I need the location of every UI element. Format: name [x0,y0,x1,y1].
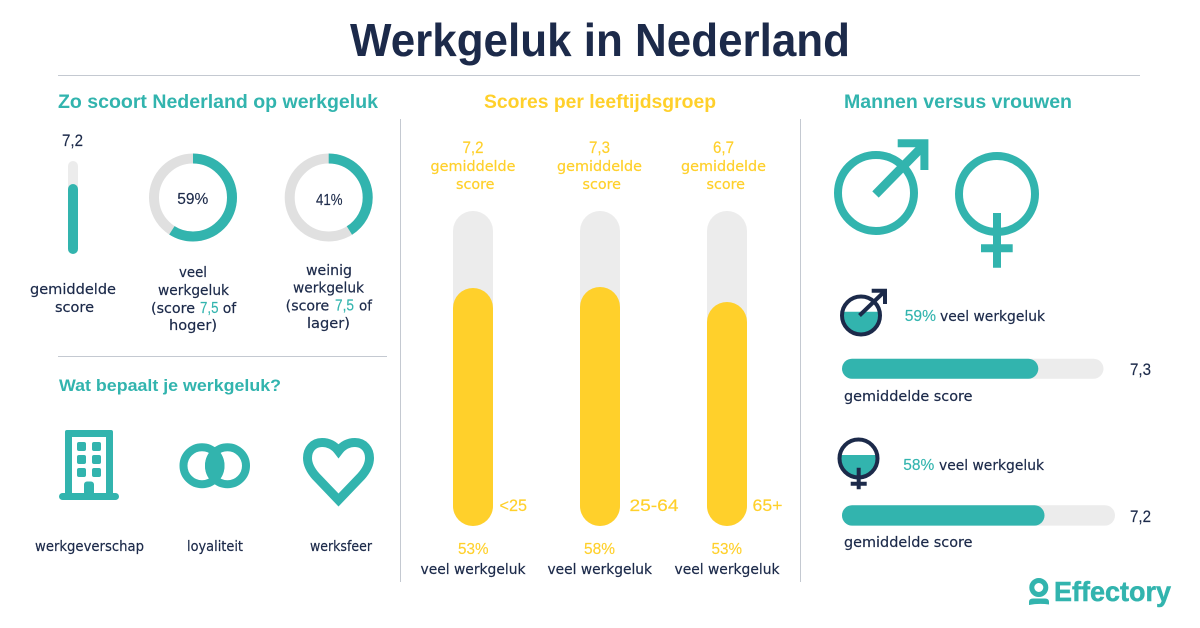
column: 25-64: 58% [584,541,615,558]
column: 25-64 [548,138,678,578]
column: 65 plus: 65+ [752,496,783,515]
column: onder 25: 7,2 [462,138,484,157]
gauge: gemiddelde score [30,131,116,316]
donut: weinig werkgeluk 41%: of [359,298,373,314]
men stats: 59% [905,308,936,325]
heading: wat bepaalt: Wat bepaalt je werkgeluk? [59,376,281,395]
icon: rings [184,447,246,484]
donut: weinig werkgeluk 41%: lager) [307,316,350,332]
donut: veel werkgeluk 59%: hoger) [169,318,217,334]
donut: weinig werkgeluk 41%: weinig [306,263,352,279]
column: 65 plus [674,138,783,578]
column: 65 plus: veel werkgeluk [674,562,780,578]
women stats: gemiddelde score [844,535,972,551]
men stats: veel werkgeluk [940,309,1046,325]
donut: veel werkgeluk 59%: (score [151,301,195,317]
women stats [839,440,1151,551]
panel: mannen versus vrouwen [838,92,1151,551]
donut: weinig werkgeluk 41%: (score [286,298,329,314]
gauge: gemiddelde score: score [55,300,94,316]
donut: veel werkgeluk 59%: 59% [177,191,209,208]
column: 25-64: gemiddelde [557,159,642,175]
women stats: 7,2 [1130,507,1151,526]
men stats: gemiddelde score [844,389,972,405]
panel: zo scoort Nederland [30,92,378,334]
column: 25-64: veel werkgeluk [548,562,653,578]
icon: heart [308,442,370,500]
column: 25-64: 25-64 [630,496,678,515]
column: onder 25: veel werkgeluk [420,562,526,578]
column: onder 25: score [456,177,494,193]
logo: Effectory: Effectory [1054,576,1171,607]
women stats: veel werkgeluk [939,458,1045,474]
donut: weinig werkgeluk 41% [286,158,373,332]
donut: weinig werkgeluk 41%: werkgeluk [293,280,365,296]
men stats: 7,3 [1130,360,1151,379]
donut: veel werkgeluk 59%: veel [179,265,207,281]
heading: mannen versus vrouwen: Mannen versus vrouwen [844,92,1072,113]
donut: weinig werkgeluk 41%: 7,5 [335,298,354,314]
women stats: 58% [903,457,934,474]
label: loyaliteit: loyaliteit [187,539,243,555]
gauge: gemiddelde score: gemiddelde [30,282,116,298]
donut: veel werkgeluk 59%: 7,5 [200,300,218,317]
donut: veel werkgeluk 59%: werkgeluk [158,283,230,299]
icon: small male [842,291,885,336]
men stats [842,291,1151,405]
heading: zo scoort: Zo scoort Nederland op werkgeluk [58,92,378,113]
column: 65 plus: 6,7 [713,138,734,157]
column: 65 plus: score [706,177,745,193]
icon: small female [839,440,878,489]
column: onder 25: 53% [458,541,488,558]
icon: building [59,430,119,500]
column: onder 25 [420,138,527,578]
donut: veel werkgeluk 59% [151,158,237,334]
column: 65 plus: 53% [712,541,742,558]
label: werkgeverschap: werkgeverschap [35,539,144,555]
gauge: gemiddelde score: 7,2 [62,131,83,150]
panel: scores per leeftijdsgroep [420,92,783,578]
label: werksfeer: werksfeer [310,539,372,555]
donut: veel werkgeluk 59%: of [223,301,237,317]
icon: female symbol [959,156,1035,268]
column: 25-64: score [582,177,621,193]
title: Werkgeluk in Nederland [350,14,850,66]
donut: weinig werkgeluk 41%: 41% [316,192,343,209]
column: onder 25: gemiddelde [430,159,516,175]
column: 25-64: 7,3 [589,138,610,157]
column: 65 plus: gemiddelde [681,159,766,175]
icon: male symbol [838,143,924,231]
column: onder 25: <25 [500,496,527,515]
heading: leeftijdsgroep: Scores per leeftijdsgroep [484,92,716,113]
panel: wat bepaalt je werkgeluk [35,376,372,555]
